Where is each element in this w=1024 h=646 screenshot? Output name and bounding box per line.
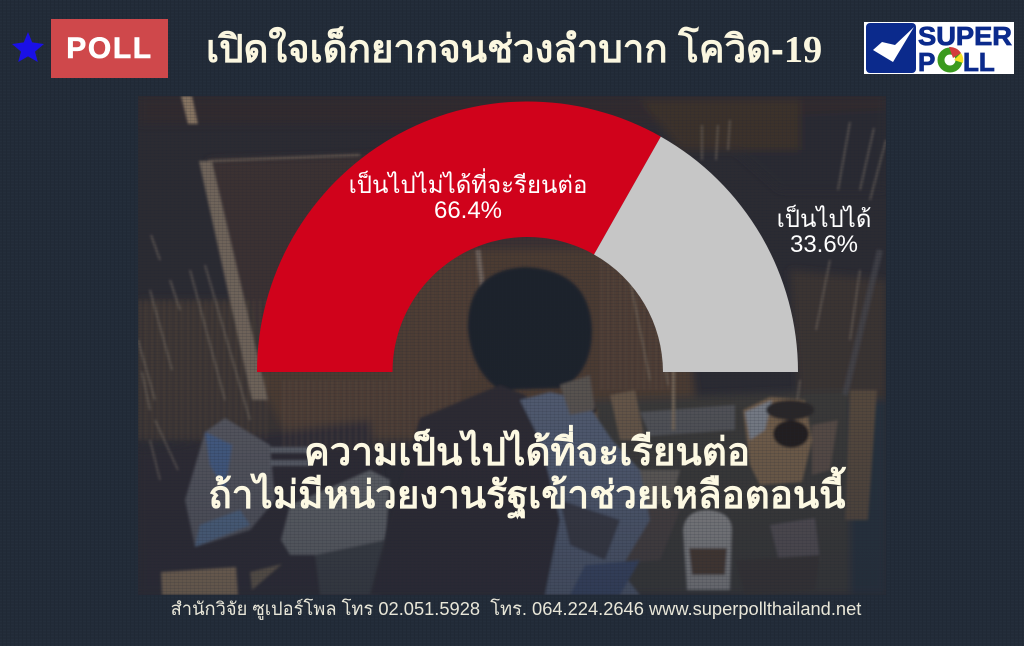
- lower objects: [160, 372, 878, 595]
- logo check mark: [866, 23, 916, 73]
- main caption: ถ้าไม่มีหน่วยงานรัฐเข้าช่วยเหลือตอนนี้: [208, 474, 846, 517]
- main caption: [208, 424, 846, 520]
- chart label: possible: เป็นไปได้: [777, 206, 871, 233]
- photo: child working in a bamboo hut: [138, 96, 886, 595]
- logo: super poll: [864, 22, 1014, 74]
- footer contact: สำนักวิจัย ซูเปอร์โพล โทร 02.051.5928 โทร. 064.224.2646 www.superpollthailand.net: [171, 598, 861, 619]
- semicircle chart: [257, 101, 798, 372]
- background photo and chart: [12, 32, 886, 595]
- poll badge: POLL: [66, 32, 153, 65]
- segment: 66.4% red: [257, 101, 661, 372]
- poll badge: [51, 19, 168, 78]
- child silhouette: [370, 267, 650, 595]
- logo word poll: [918, 47, 995, 77]
- chart label: not possible: 66.4%: [434, 197, 502, 224]
- chart label: not possible: [349, 168, 587, 224]
- segment: 33.6% grey: [594, 137, 798, 372]
- star icon: [12, 32, 44, 62]
- chart label: possible: 33.6%: [790, 231, 858, 258]
- title: เปิดใจเด็กยากจนช่วงลำบาก โควิด-19: [206, 28, 822, 71]
- bamboo streaks: [138, 96, 886, 480]
- chart label: not possible: เป็นไปไม่ได้ที่จะรียนต่อ: [349, 172, 587, 199]
- chart label: possible: [777, 204, 871, 258]
- main caption: ความเป็นไปได้ที่จะเรียนต่อ: [304, 431, 750, 474]
